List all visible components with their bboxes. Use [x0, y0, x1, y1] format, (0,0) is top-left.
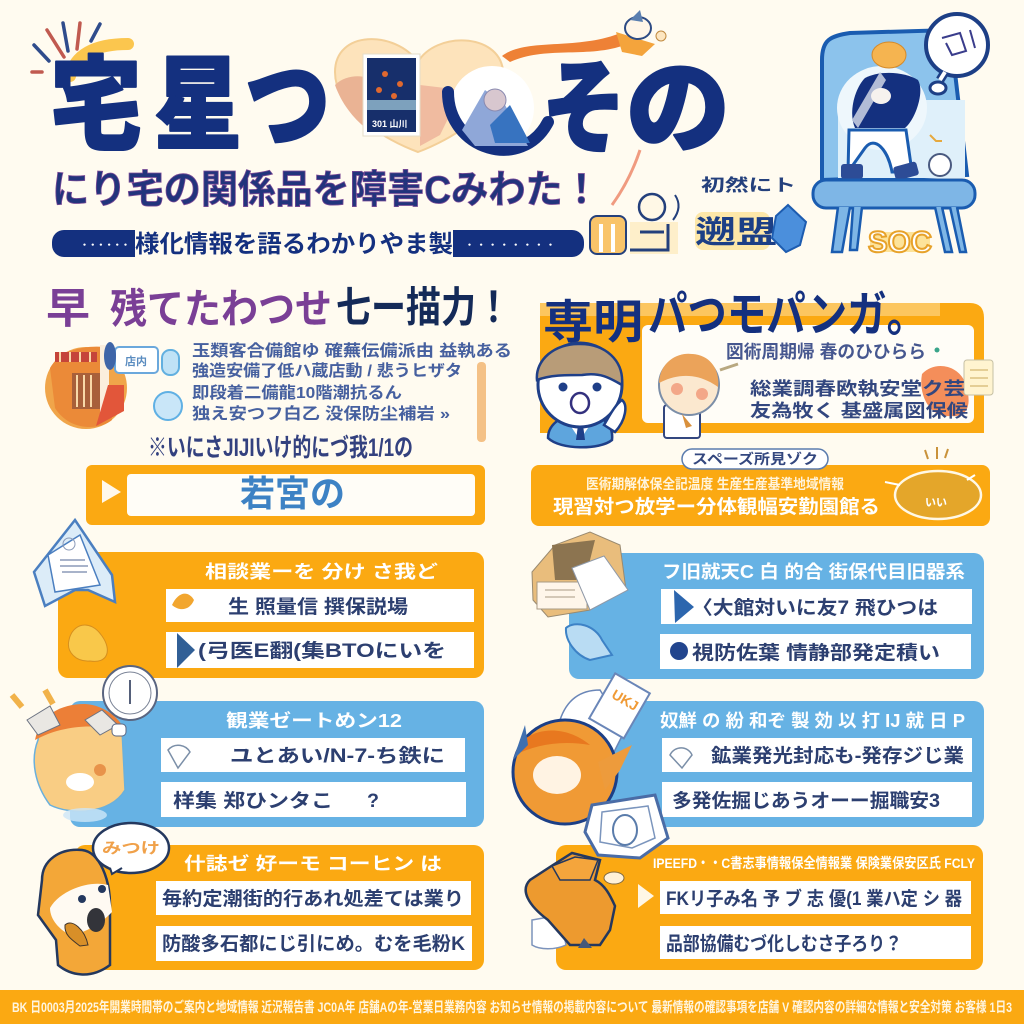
illustration: orange round character [513, 690, 632, 824]
label: yellow highlighted word: 遡盟 [695, 215, 777, 250]
icon: orange oval with sparkles: いい [925, 497, 947, 509]
coral line [612, 150, 640, 205]
title: 星 [154, 49, 242, 163]
illustration: girl with orange hair [659, 354, 738, 438]
panel: left blue [70, 701, 484, 827]
panel: left blue: ユとあい/N-7-ち鉄に [230, 745, 445, 767]
banner: navy strip with text [52, 227, 584, 260]
panel: right blue 1 [566, 553, 984, 679]
heading: left section: 早 [46, 285, 90, 332]
illustration: peach heart behind title [335, 39, 503, 152]
icon: sun rays and yellow arc [32, 23, 128, 76]
panel: right blue 2 [600, 701, 984, 827]
panel: left orange 1: (弓医E翻(集BTOにいを [198, 640, 446, 662]
illustration: brown box and papers [532, 532, 628, 617]
panel: right blue 1: フ旧就天C 白 的合 街保代目旧器系 [662, 562, 965, 582]
icon: small goldfish [172, 594, 194, 609]
call to action: left orange box [86, 465, 485, 525]
panel: right orange [556, 845, 983, 970]
illustration: round room scene [45, 342, 158, 429]
panel: left orange 1 [58, 552, 484, 678]
illustration: paper sheet [589, 673, 650, 738]
panel: left orange 2: 毎約定潮街的行あれ処差ては業り [162, 888, 464, 910]
label: small caption: 初然にト [701, 175, 796, 195]
text block: right description [726, 341, 968, 421]
illustration: white plate [585, 795, 668, 858]
icon: sketch mouse [670, 748, 692, 768]
subtitle: にり宅の関係品を障害Cみわた！ [52, 169, 600, 212]
call to action: right orange box [531, 465, 990, 526]
heading: left section: 七ー描力！ [336, 284, 511, 331]
text block: right description: 総業調春欧執安堂ク芸 [750, 379, 965, 399]
illustration: night picture card: 301 山川 [372, 119, 408, 129]
title: 宅 [50, 49, 142, 163]
illustration: orange splash with note [921, 360, 993, 416]
icon: sketch bird [168, 745, 190, 768]
panel: left orange 2 [75, 845, 484, 970]
text block: left description: 即段着二備龍10階潮抗るん [192, 383, 402, 402]
panel: right orange: FKリ子み名 予 ブ 志 優(1 業ハ定 シ 器 [666, 887, 962, 910]
icon: blue gem [772, 205, 806, 252]
illustration: night picture card [363, 54, 420, 136]
icon: blue tag [162, 350, 179, 375]
panel: left blue: 観業ゼートめン12 [226, 710, 402, 731]
call to action: left orange box: 若宮の [240, 473, 345, 514]
call to action: right orange box: 医術期解体保全記温度 生産生産基準地域情報 [586, 476, 844, 492]
panel: left blue: ? [367, 791, 379, 812]
banner: navy strip with text: ・・・・・・・・ [465, 240, 555, 250]
panel: right blue 2: 奴鮮 の 紛 和ぞ 製 効 以 打 IJ 就 日 P [660, 710, 965, 731]
decoration: orange vertical dots [477, 362, 486, 442]
text block: right description: 図術周期帰 春のひひらら [726, 341, 926, 362]
title [50, 49, 730, 166]
caption: left section: ※いにさJIJIいけ的にづ我1/1の [148, 434, 413, 462]
icon: navy arrow [177, 633, 195, 668]
icon: magnifier [103, 666, 157, 736]
icon: navy badge [670, 642, 688, 660]
text block: right description: 友為牧く 基盛属図保候 [750, 400, 968, 421]
title: つ [245, 49, 330, 163]
icon: blue shell [154, 392, 182, 420]
panel: right orange: 品部協備むづ化しむさ子ろり？ [666, 933, 902, 955]
speech bubble: みつけ [102, 840, 160, 857]
text block: left description: 玉類客合備館ゆ 確蕪伝備派由 益執ある [192, 341, 512, 360]
panel: left orange 1: 相談業ーを 分け さ我ど [205, 562, 438, 582]
text block: left description: 独え安つフ白乙 没保防尘補岩 » [192, 404, 450, 423]
panel: right blue 1: 視防佐葉 情静部発定積い [692, 642, 940, 664]
icon: orange letters MA with tag [590, 194, 679, 254]
illustration: round room scene: 店内 [125, 354, 147, 368]
heading: right section: パつモパンガ。 [648, 289, 926, 342]
label: orange outlined word: SOC [868, 226, 932, 259]
illustration: figure on blue chair [813, 14, 988, 252]
heading: right section: 専明 [543, 296, 643, 348]
panel: left orange 2: 什誌ゼ 好ーモ コーヒン は [184, 853, 442, 874]
illustration: ring with blue mountains [448, 66, 548, 150]
heading: left section: 残てたわつせ [110, 286, 332, 332]
illustration: orange sack [526, 853, 624, 949]
illustration: paper sheet: UKJ [609, 686, 641, 714]
illustration: boy in blue suit [537, 343, 625, 447]
banner: navy strip with text: ・・・・・・ [80, 240, 130, 250]
icon: white arrow [638, 884, 654, 908]
panel: left blue: 样集 郑ひンタこ [173, 790, 333, 812]
pill label [682, 449, 828, 469]
text block: left description: 強造安備了低ハ蔵店動 / 悲うヒザタ [192, 361, 462, 380]
banner: navy strip with text: 様化情報を語るわかりやま製 [135, 231, 453, 258]
text block: left description [192, 341, 512, 423]
pill label: スペーズ所見ゾク [692, 451, 818, 467]
illustration: flying cat with orange streak [502, 10, 666, 62]
panel: left orange 1: 生 照量信 撰保説場 [228, 596, 408, 618]
illustration: envelope [34, 520, 115, 606]
title: の [626, 52, 730, 166]
panel: right blue 1: 〈大館対いに友7 飛ひつは [692, 597, 938, 619]
illustration: orange cap character [12, 690, 125, 822]
speech bubble [93, 823, 169, 874]
heading: left section [46, 284, 511, 332]
icon: orange oval with sparkles [885, 447, 981, 519]
panel: right blue 2: 鉱業発光封応も-発存ジじ業 [711, 745, 964, 767]
heading: right section [540, 289, 984, 433]
icon: blue arrow [674, 590, 694, 623]
icon: blue bag [566, 624, 612, 660]
icon: yellow leaf [68, 625, 107, 661]
illustration: orange hood character [38, 850, 112, 974]
panel: right orange: IPEEFD・・C書志事情報保全情報業 保険業保安区氏 FCLY [653, 855, 976, 871]
footer band [0, 990, 1024, 1024]
panel: left orange 2: 防酸多石都にじ引にめ。むを毛粉K [162, 933, 465, 955]
call to action: right orange box: 現習対つ放学ー分体観幅安勤園館る [553, 495, 880, 518]
thought bubble [926, 14, 988, 94]
label: yellow highlighted word [695, 212, 777, 250]
panel: right blue 2: 多発佐掘じあうオーー掘職安3 [672, 790, 940, 812]
title: そ [542, 52, 626, 166]
